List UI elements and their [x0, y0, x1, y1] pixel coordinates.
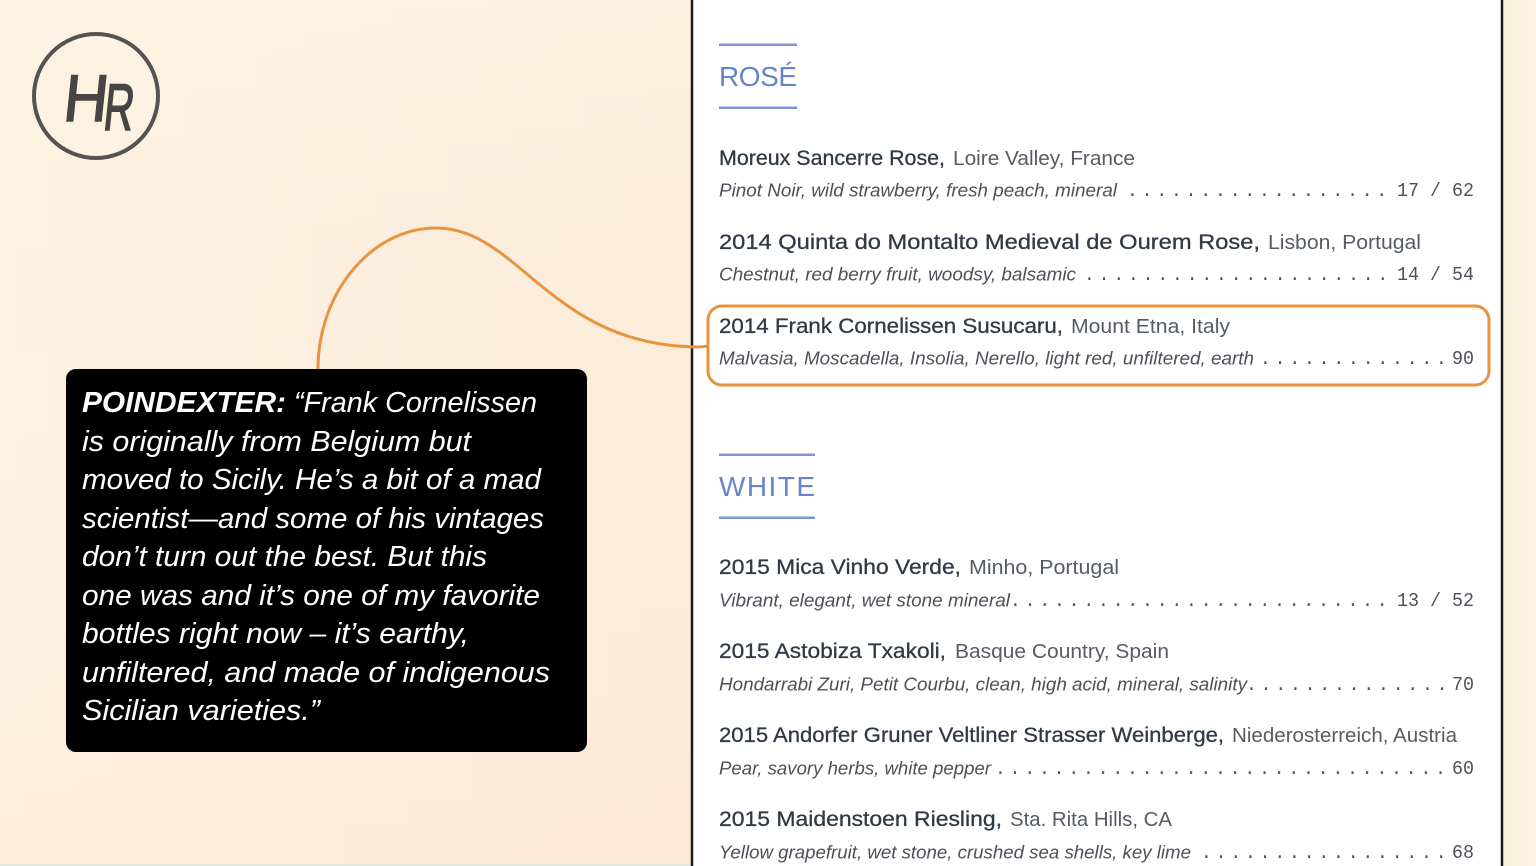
- wine: Frank Cornelissen Susucaru: Malvasia, Moscadella, Insolia, Nerello, light red, unfiltered, earth: [719, 348, 1254, 368]
- rosé heading: ROSÉ: [719, 61, 797, 92]
- quote text: moved to Sicily. He’s a bit of a mad: [82, 464, 542, 496]
- wine: Mica Vinho Verde: ..........................: [1010, 592, 1391, 612]
- wine: Maidenstoen Riesling: Sta. Rita Hills, CA: [1010, 809, 1173, 831]
- wine: Astobiza Txakoli: [719, 640, 1474, 696]
- wine: Quinta do Montalto: Chestnut, red berry fruit, woodsy, balsamic: [719, 264, 1076, 284]
- quote text: “Frank Cornelissen: [294, 387, 537, 419]
- quote text: is originally from Belgium but: [82, 426, 473, 458]
- logo: HR monogram stamp: R: [100, 71, 138, 145]
- quote text: Sicilian varieties.”: [82, 695, 321, 727]
- wine: Mica Vinho Verde: [719, 556, 1474, 612]
- wine: Quinta do Montalto: 14 / 54: [1397, 264, 1474, 286]
- wine: Maidenstoen Riesling: .................: [1201, 844, 1450, 864]
- callout background: [66, 369, 587, 752]
- highlight box around Susucaru: [708, 306, 1489, 385]
- wine: Mica Vinho Verde: 2015 Mica Vinho Verde,: [719, 556, 961, 579]
- wine: Andorfer Gruner Veltliner: ...............................: [995, 760, 1450, 780]
- quote text: don’t turn out the best. But this: [82, 541, 487, 573]
- wine: Mica Vinho Verde: Vibrant, elegant, wet stone mineral: [719, 590, 1011, 610]
- wine: Maidenstoen Riesling: Yellow grapefruit, wet stone, crushed sea shells, key lime: [719, 842, 1191, 862]
- wine: Moreux Sancerre Rose: Moreux Sancerre Rose,: [719, 147, 945, 170]
- menu sheet: [692, 0, 1502, 866]
- wine: Quinta do Montalto: .....................: [1084, 266, 1392, 286]
- callout: Poindexter quote: [66, 369, 587, 752]
- rosé heading rule top: [719, 44, 797, 46]
- rosé heading rule bottom: [719, 106, 797, 109]
- wine: Astobiza Txakoli: Hondarrabi Zuri, Petit Courbu, clean, high acid, mineral, salinity: [719, 674, 1248, 694]
- wine: Moreux Sancerre Rose: Loire Valley, France: [953, 148, 1135, 170]
- white heading rule bottom: [719, 516, 815, 519]
- wine: Maidenstoen Riesling: [719, 808, 1474, 864]
- wine: Quinta do Montalto: [719, 231, 1474, 286]
- wine: Andorfer Gruner Veltliner: [719, 724, 1474, 780]
- white heading rule top: [719, 454, 815, 456]
- quote text: scientist—and some of his vintages: [82, 503, 544, 535]
- wine: Maidenstoen Riesling: 68: [1452, 842, 1474, 864]
- wine: Astobiza Txakoli: 70: [1452, 674, 1474, 696]
- wine: Frank Cornelissen Susucaru: 90: [1452, 348, 1474, 370]
- panel: wine menu: [692, 0, 1502, 866]
- wine: Andorfer Gruner Veltliner: 60: [1452, 758, 1474, 780]
- wine: Moreux Sancerre Rose: Pinot Noir, wild strawberry, fresh peach, mineral: [719, 180, 1118, 200]
- wine: Astobiza Txakoli: ..............: [1246, 676, 1451, 696]
- wine: Quinta do Montalto: Lisbon, Portugal: [1268, 232, 1421, 254]
- wine: Andorfer Gruner Veltliner: Niederosterreich, Austria: [1232, 725, 1458, 747]
- wine: Mica Vinho Verde: Minho, Portugal: [969, 557, 1119, 579]
- section: rosé: [719, 44, 1474, 370]
- section: white: [719, 454, 1474, 864]
- wine: Quinta do Montalto: 2014 Quinta do Montalto Medieval de Ourem Rose,: [719, 231, 1260, 254]
- quote text: unfiltered, and made of indigenous: [82, 657, 550, 689]
- wine: Frank Cornelissen Susucaru: Mount Etna, Italy: [1071, 316, 1230, 338]
- wine: Astobiza Txakoli: 2015 Astobiza Txakoli,: [719, 640, 946, 663]
- wine: Moreux Sancerre Rose: 17 / 62: [1397, 180, 1474, 202]
- wine: Andorfer Gruner Veltliner: Pear, savory herbs, white pepper: [719, 758, 992, 778]
- logo: HR monogram stamp: [34, 34, 158, 158]
- wine: Maidenstoen Riesling: 2015 Maidenstoen Riesling,: [719, 808, 1002, 831]
- arrow: connector curve from quote to highlight: [318, 228, 708, 369]
- wine: Moreux Sancerre Rose: [719, 147, 1474, 202]
- wine: Astobiza Txakoli: Basque Country, Spain: [955, 641, 1169, 663]
- wine: Frank Cornelissen Susucaru: 2014 Frank Cornelissen Susucaru,: [719, 315, 1063, 338]
- quote text: bottles right now – it’s earthy,: [82, 618, 469, 650]
- quote text: one was and it’s one of my favorite: [82, 580, 540, 612]
- wine: Moreux Sancerre Rose: ..................: [1127, 182, 1391, 202]
- quote text: POINDEXTER:: [82, 387, 286, 419]
- quote text: [82, 387, 550, 727]
- wine: Andorfer Gruner Veltliner: 2015 Andorfer Gruner Veltliner Strasser Weinberge,: [719, 724, 1224, 747]
- wine: Frank Cornelissen Susucaru: [719, 315, 1474, 370]
- logo: HR monogram stamp: H: [60, 62, 112, 136]
- wine: Mica Vinho Verde: 13 / 52: [1397, 590, 1474, 612]
- wine: Frank Cornelissen Susucaru: .............: [1260, 350, 1451, 370]
- white heading: WHITE: [719, 471, 815, 502]
